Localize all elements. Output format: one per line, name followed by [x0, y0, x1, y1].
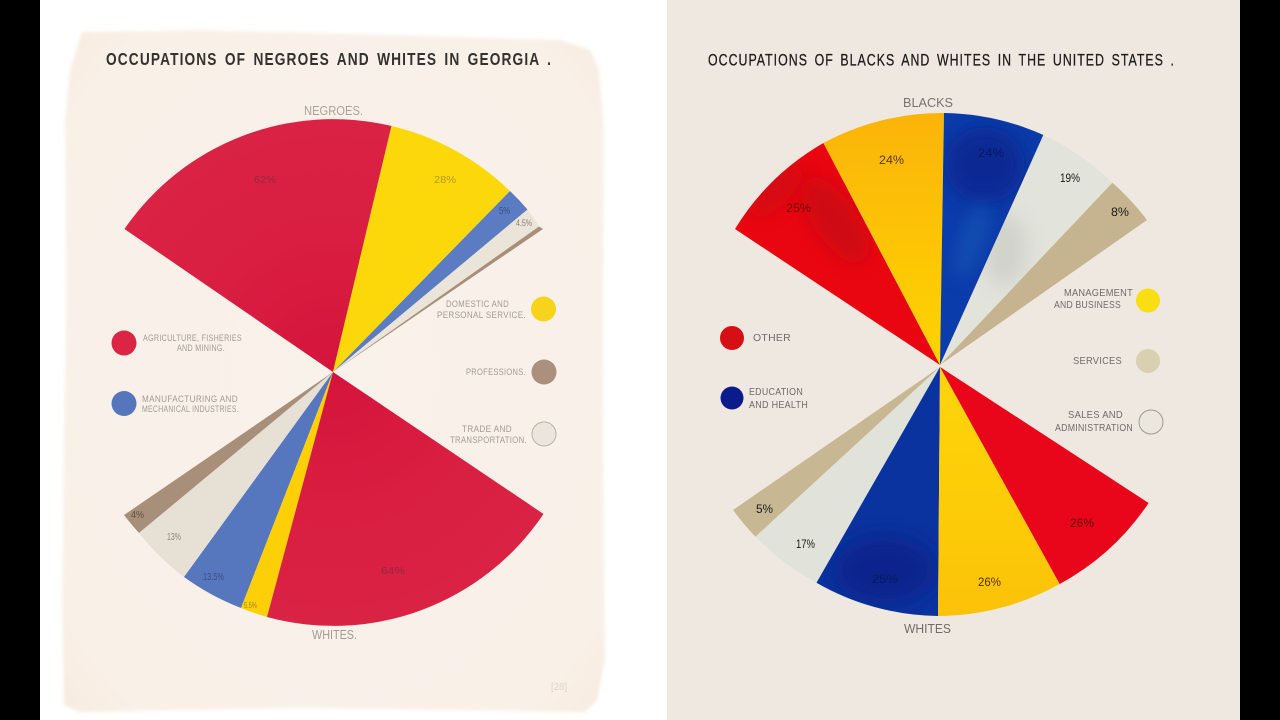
wedge: services 5%: [733, 367, 940, 537]
label 24% yellow: 24%: [879, 153, 904, 167]
paint shading: red: [746, 160, 877, 266]
legend: education and health: AND HEALTH: [749, 399, 808, 411]
legend: other: [720, 326, 791, 350]
heading: Blacks: BLACKS: [903, 95, 953, 110]
legend: agriculture: AGRICULTURE, FISHERIES: [143, 333, 242, 343]
label 19%: 19%: [1060, 171, 1080, 185]
chart: Whites fan: [733, 367, 1149, 616]
label 26% red: 26%: [1070, 516, 1094, 530]
label 4.5%: 4.5%: [516, 218, 532, 228]
title: OCCUPATIONS OF NEGROES AND WHITES IN GEORGIA .: [106, 49, 552, 69]
label 26% yellow: 26%: [978, 575, 1001, 589]
paint shading: blue top: [945, 127, 1025, 281]
legend: manufacturing: MANUFACTURING AND: [142, 394, 238, 404]
wedge: trade 4.5%: [333, 210, 539, 372]
legend: services: [1073, 349, 1160, 373]
label 13.5%: 13.5%: [203, 571, 224, 583]
legend: sales and administration: SALES AND: [1068, 409, 1123, 421]
wedge: manufacturing 5%: [333, 191, 528, 372]
wedge: other 25%: [735, 143, 940, 365]
wedge: management 26%: [938, 367, 1060, 616]
label 5%: 5%: [756, 502, 773, 516]
panel: United States plate: [667, 0, 1240, 720]
label 64%: 64%: [381, 565, 405, 577]
legend: domestic service: DOMESTIC AND: [446, 299, 509, 309]
legend: domestic service: [437, 296, 556, 322]
label 17%: 17%: [796, 537, 815, 551]
legend: management and business: AND BUSINESS: [1054, 299, 1121, 311]
legend: agriculture: [112, 330, 242, 356]
legend: professions: [466, 360, 556, 384]
paint shading: white top: [983, 214, 1027, 286]
legend: trade and transportation: TRADE AND: [462, 424, 512, 434]
wedge: professions 4%: [124, 372, 333, 533]
plate number: [28]: [551, 682, 567, 693]
aged paper sheet: [62, 30, 605, 712]
wedge: education 25%: [816, 367, 940, 616]
wedge: trade 13%: [139, 372, 333, 577]
heading: Whites: WHITES: [904, 621, 951, 636]
heading: Whites: WHITES.: [312, 627, 357, 642]
black side bar right: [1240, 0, 1280, 720]
wedge: professions 0.5%: [333, 226, 543, 372]
legend: trade and transportation: [450, 422, 556, 446]
wedge: sales 17%: [756, 367, 940, 583]
label 24% blue: 24%: [978, 146, 1004, 160]
wedge: agriculture 64%: [267, 372, 544, 626]
label 62%: 62%: [254, 174, 276, 186]
chart: Blacks fan: [735, 113, 1147, 365]
label 4%: 4%: [131, 509, 144, 521]
wedge: domestic 5.5%: [241, 372, 333, 617]
label 5.5%: 5.5%: [244, 601, 257, 610]
legend: services: SERVICES: [1073, 355, 1122, 367]
white background behind left plate: [40, 0, 667, 720]
label 25%: 25%: [786, 201, 811, 215]
wedge: other 26%: [940, 367, 1149, 584]
legend: trade and transportation: TRANSPORTATION.: [450, 435, 527, 445]
chart: Negroes fan: [124, 119, 543, 372]
heading: Negroes: NEGROES.: [304, 103, 363, 118]
legend: agriculture: AND MINING.: [177, 343, 225, 353]
label 5%: 5%: [499, 205, 510, 217]
wedge: services 8%: [940, 183, 1147, 365]
label 13%: 13%: [167, 531, 181, 543]
chart: Whites fan: [124, 372, 544, 626]
paint shading: blue bottom: [835, 536, 935, 604]
legend: education and health: EDUCATION: [749, 386, 803, 398]
legend: other: OTHER: [753, 332, 791, 344]
label 25% blue: 25%: [872, 572, 898, 586]
wedge: agriculture 62%: [124, 119, 392, 372]
legend: domestic service: PERSONAL SERVICE.: [437, 310, 526, 320]
legend: professions: PROFESSIONS.: [466, 367, 526, 377]
wedge: education 24%: [940, 113, 1043, 365]
legend: manufacturing: MECHANICAL INDUSTRIES.: [142, 404, 239, 414]
wedge: sales 19%: [940, 135, 1112, 365]
panel: Georgia plate: [62, 30, 605, 712]
black side bar left: [0, 0, 40, 720]
legend: management and business: MANAGEMENT: [1064, 287, 1133, 299]
legend: sales and administration: [1055, 409, 1163, 434]
legend: education and health: [720, 386, 808, 411]
legend: sales and administration: ADMINISTRATION: [1055, 422, 1133, 434]
wedge: domestic service 28%: [333, 126, 510, 372]
wedge: manufacturing 13.5%: [184, 372, 333, 608]
legend: management and business: [1054, 287, 1160, 312]
legend: manufacturing: [112, 391, 239, 416]
background paper: [667, 0, 1240, 720]
label 28%: 28%: [434, 174, 456, 186]
label 8%: 8%: [1111, 205, 1129, 219]
wedge: management 24%: [823, 113, 944, 365]
